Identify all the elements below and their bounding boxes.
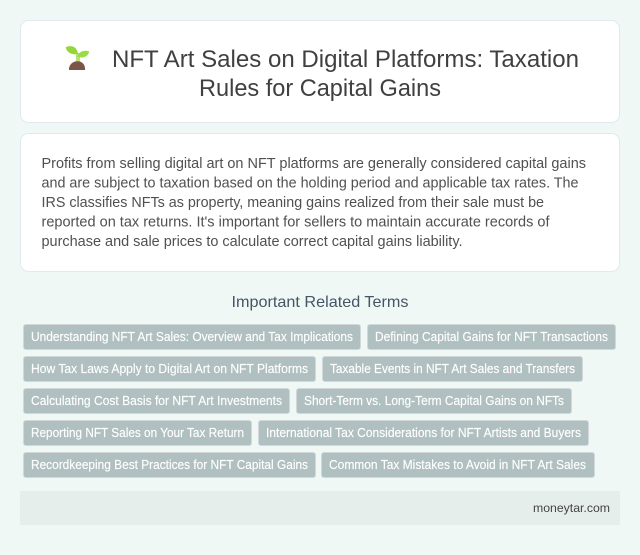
panel: summary text: and are subject to taxation based on the holding period and applicable tax rates. The <box>42 176 578 192</box>
heading: title <box>112 46 579 102</box>
tag: International Tax Considerations for NFT Artists and Buyers <box>266 426 581 440</box>
tag <box>24 324 360 350</box>
tag <box>24 388 290 414</box>
tag: Common Tax Mistakes to Avoid in NFT Art Sales <box>329 458 586 472</box>
tag: Defining Capital Gains for NFT Transactions <box>375 330 608 344</box>
tag <box>24 420 252 446</box>
tag <box>24 356 316 382</box>
heading: title: NFT Art Sales on Digital Platforms: Taxation <box>112 46 579 73</box>
tag <box>322 452 594 478</box>
panel: summary text: purchase and sale prices to calculate correct capital gains liability. <box>42 234 462 250</box>
icon: sprout <box>66 46 89 70</box>
panel: summary text: reported on tax returns. It's important for sellers to maintain accurate records of <box>42 214 551 230</box>
panel: title header <box>20 20 620 122</box>
panel: summary text: Profits from selling digital art on NFT platforms are generally considered capital gains <box>42 156 586 172</box>
heading: important related terms: Important Related Terms <box>232 294 408 311</box>
footer <box>20 491 620 525</box>
tag: Reporting NFT Sales on Your Tax Return <box>31 426 244 440</box>
footer: moneytar.com <box>533 501 610 515</box>
tag: Understanding NFT Art Sales: Overview and Tax Implications <box>31 330 353 344</box>
tag: Calculating Cost Basis for NFT Art Investments <box>31 394 282 408</box>
panel: summary text: IRS classifies NFTs as property, meaning gains realized from their sale must be <box>42 195 544 211</box>
tag: Taxable Events in NFT Art Sales and Transfers <box>330 362 575 376</box>
tag <box>368 324 616 350</box>
tag: How Tax Laws Apply to Digital Art on NFT Platforms <box>31 362 308 376</box>
tag <box>258 420 588 446</box>
tag list: related terms <box>24 324 616 478</box>
tag: Recordkeeping Best Practices for NFT Capital Gains <box>31 458 308 472</box>
panel: summary text <box>20 134 620 272</box>
tag <box>322 356 582 382</box>
tag: Short-Term vs. Long-Term Capital Gains on NFTs <box>304 394 564 408</box>
heading: title: Rules for Capital Gains <box>199 75 441 102</box>
tag <box>296 388 572 414</box>
tag <box>24 452 316 478</box>
